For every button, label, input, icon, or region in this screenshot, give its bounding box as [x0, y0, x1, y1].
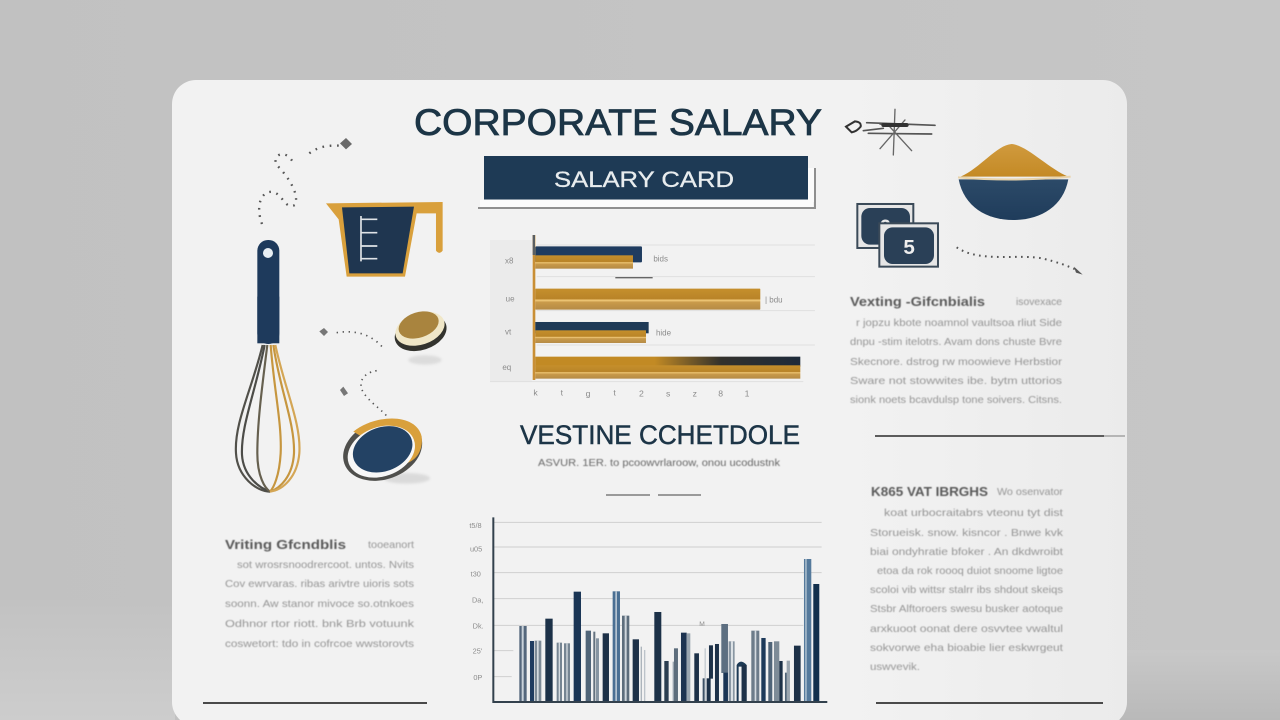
- y axis labels: 25': [473, 646, 483, 655]
- x axis labels: 1: [745, 389, 750, 399]
- arrow: dotted curl to whisk: [259, 138, 352, 224]
- text block: lower right: arxkuoot oonat dere osvvtee vwaltul: [870, 623, 1063, 635]
- text block: lower left: soonn. Aw stanor mivoce so.otnkoes: [225, 598, 414, 610]
- text block: lower right: Storueisk. snow. kisncor . Bnwe kvk: [870, 527, 1064, 539]
- x axis labels: k: [533, 388, 538, 398]
- arrow: dotted to navy coin: [340, 371, 387, 416]
- text block: upper right: Skecnore. dstrog rw moowieve Herbstior: [850, 356, 1063, 368]
- bars: group one: [535, 246, 642, 269]
- bars: group three: [535, 322, 649, 343]
- value labels: | bdu: [765, 295, 783, 304]
- value labels: hide: [656, 329, 672, 338]
- column chart: M: [699, 621, 705, 628]
- text block: lower left: [225, 537, 415, 650]
- banner: salary card: SALARY CARD: [554, 167, 734, 192]
- x axis labels: [533, 388, 750, 399]
- bars: group four: [535, 357, 800, 379]
- x axis labels: t: [561, 388, 564, 398]
- text block: lower right: scoloi vib wittsr stalrr ibs shdout skeiqs: [870, 584, 1063, 596]
- short dividers: [606, 494, 701, 496]
- bottom rules: [203, 702, 1103, 704]
- y axis labels: 0P: [473, 673, 482, 682]
- text block: lower left: sot wrosrsnoodrercoot. untos. Nvits: [237, 559, 414, 571]
- x axis labels: g: [586, 389, 591, 399]
- x axis labels: t: [613, 388, 616, 398]
- text block: upper right: [850, 294, 1063, 406]
- category labels: ue: [506, 295, 515, 304]
- y axis labels: [469, 521, 484, 682]
- text block: lower right: [870, 484, 1064, 673]
- text block: upper right: Sware not stowwites ibe. bytm uttorios: [850, 375, 1062, 387]
- icon: stacked salary cards: [857, 204, 938, 267]
- subheading: ASVUR. 1ER. to pcoowvrlaroow, onou ucodustnk: [538, 457, 781, 469]
- text block: lower right: etoa da rok roooq duiot snoome ligtoe: [877, 565, 1063, 577]
- text block: upper right: dnpu -stim itelotrs. Avam dons chuste Bvre: [850, 336, 1062, 348]
- y axis labels: t5/8: [469, 521, 482, 530]
- text block: upper right: isovexace: [1016, 296, 1062, 308]
- text block: upper right: sionk noets bcavdulsp tone soivers. Citsns.: [850, 394, 1062, 406]
- text block: lower left: Vriting Gfcndblis: [225, 537, 346, 552]
- text block: lower right: sokvorwe eha bioabie lier eskwrgeut: [870, 642, 1063, 654]
- x axis labels: 8: [718, 389, 723, 399]
- x axis labels: 2: [639, 389, 644, 399]
- category labels: [502, 256, 515, 372]
- text block: lower right: K865 VAT IBRGHS: [871, 484, 988, 499]
- y axis labels: Dk.: [473, 621, 484, 630]
- y axis labels: t30: [471, 570, 481, 579]
- text block: upper right: Vexting -Gifcnbialis: [850, 294, 985, 309]
- axes: [493, 517, 827, 702]
- panel: salary card: [172, 80, 1127, 720]
- columns: [519, 559, 819, 701]
- category labels: vt: [505, 327, 512, 336]
- text block: lower left: Odhnor rtor riott. bnk Brb votuunk: [225, 618, 415, 630]
- icon: stacked salary cards: 6: [879, 215, 891, 238]
- icon: sparkle pen: [846, 109, 935, 155]
- heading: vesting schedule: VESTINE CCHETDOLE: [520, 420, 800, 450]
- icon: stacked salary cards: 5: [903, 236, 915, 259]
- column chart: [469, 517, 827, 702]
- title: CORPORATE SALARY: [414, 102, 822, 143]
- horizontal bar chart: [490, 235, 815, 399]
- icon: navy coin: [334, 408, 431, 491]
- text block: lower right: koat urbocraitabrs vteonu tyt dist: [884, 507, 1063, 519]
- text block: lower left: tooeanort: [368, 539, 414, 551]
- text block: lower right: Wo osenvator: [997, 486, 1064, 498]
- icon: gold coin: [390, 306, 451, 365]
- icon: whisk: [236, 240, 299, 492]
- text block: lower right: biai ondyhratie bfoker . An dkdwroibt: [870, 546, 1063, 558]
- category labels: x8: [505, 256, 514, 265]
- x axis labels: s: [666, 389, 671, 399]
- value labels: [653, 255, 783, 338]
- icon: measuring cup: [326, 202, 443, 277]
- value labels: bids: [653, 255, 668, 264]
- text block: upper right: r jopzu kbote noamnol vaultsoa rliut Side: [856, 317, 1062, 329]
- arrow: dotted to coin: [319, 328, 382, 347]
- text block: lower left: Cov ewrvaras. ribas arivtre uioris sots: [225, 578, 414, 590]
- text block: lower left: coswetort: tdo in cofrcoe wwstorovts: [225, 638, 414, 650]
- arrow: dotted right: [957, 247, 1083, 275]
- bar: group two: [535, 289, 760, 310]
- banner: salary card: [478, 156, 815, 208]
- x axis labels: z: [693, 389, 697, 399]
- icon: gold-filled bowl: [958, 144, 1071, 220]
- divider upper right: [875, 435, 1125, 437]
- category labels: eq: [502, 363, 511, 372]
- y axis labels: Da,: [472, 596, 483, 605]
- text block: lower right: uswvevik.: [870, 661, 920, 673]
- text block: lower right: Stsbr Alftoroers swesu busker aotoque: [870, 603, 1063, 615]
- y axis labels: u05: [470, 545, 482, 554]
